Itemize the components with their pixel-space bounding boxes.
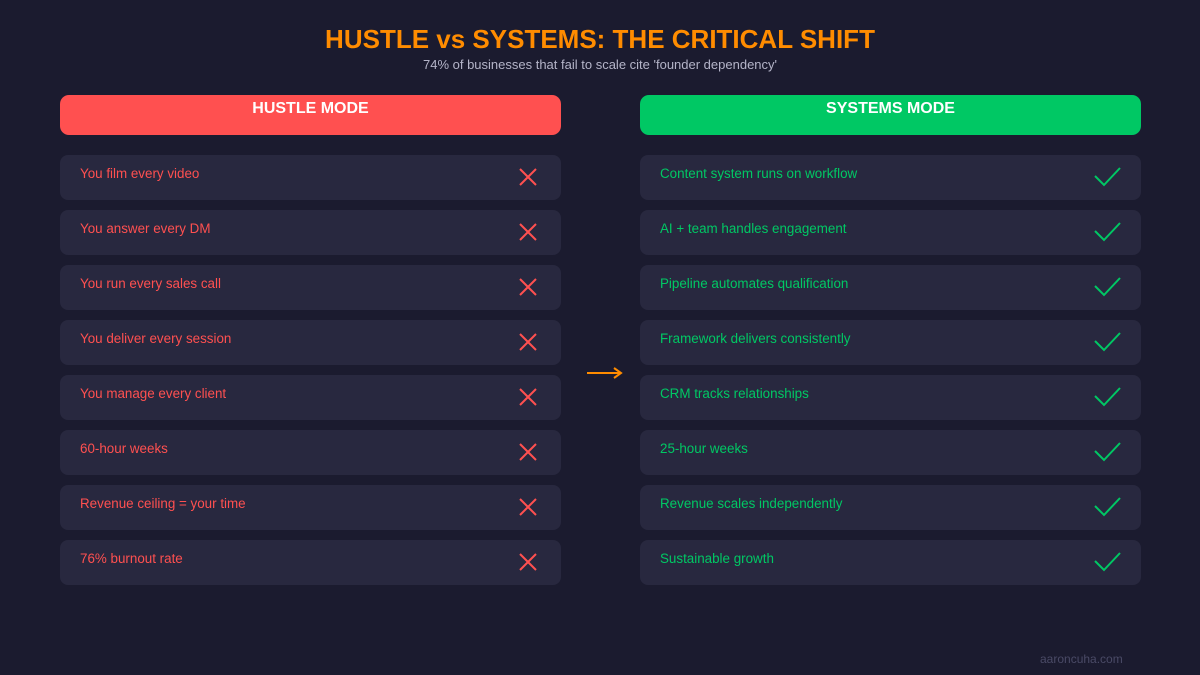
panel: systems list [640,155,1141,585]
row: You film every video [80,166,199,181]
row [640,485,1141,530]
row: Sustainable growth [660,551,774,566]
title: HUSTLE vs SYSTEMS: THE CRITICAL SHIFT [325,24,875,54]
subtitle: 74% of businesses that fail to scale cite 'founder dependency' [423,57,777,72]
row: You manage every client [80,386,226,401]
row: 76% burnout rate [80,551,183,566]
row [640,375,1141,420]
row: 60-hour weeks [80,441,168,456]
row [640,265,1141,310]
row: 25-hour weeks [660,441,748,456]
row [60,155,561,200]
row: Content system runs on workflow [660,166,857,181]
row: AI + team handles engagement [660,221,846,236]
row: Revenue ceiling = your time [80,496,246,511]
row: You run every sales call [80,276,221,291]
row: Framework delivers consistently [660,331,851,346]
arrow [587,367,623,379]
header: systems mode: SYSTEMS MODE [826,100,955,117]
row: You deliver every session [80,331,231,346]
row [640,155,1141,200]
panel: hustle list [60,155,561,585]
row [640,430,1141,475]
row [60,430,561,475]
row: CRM tracks relationships [660,386,809,401]
row [60,375,561,420]
header: hustle mode: HUSTLE MODE [252,100,369,117]
row [640,210,1141,255]
footer credit: aaroncuha.com [1040,652,1123,666]
row [60,320,561,365]
row [640,320,1141,365]
row [60,485,561,530]
header: hustle mode [60,95,561,135]
row [60,540,561,585]
row [60,210,561,255]
row: Revenue scales independently [660,496,842,511]
row [60,265,561,310]
header: systems mode [640,95,1141,135]
row: Pipeline automates qualification [660,276,848,291]
row [640,540,1141,585]
row: You answer every DM [80,221,210,236]
